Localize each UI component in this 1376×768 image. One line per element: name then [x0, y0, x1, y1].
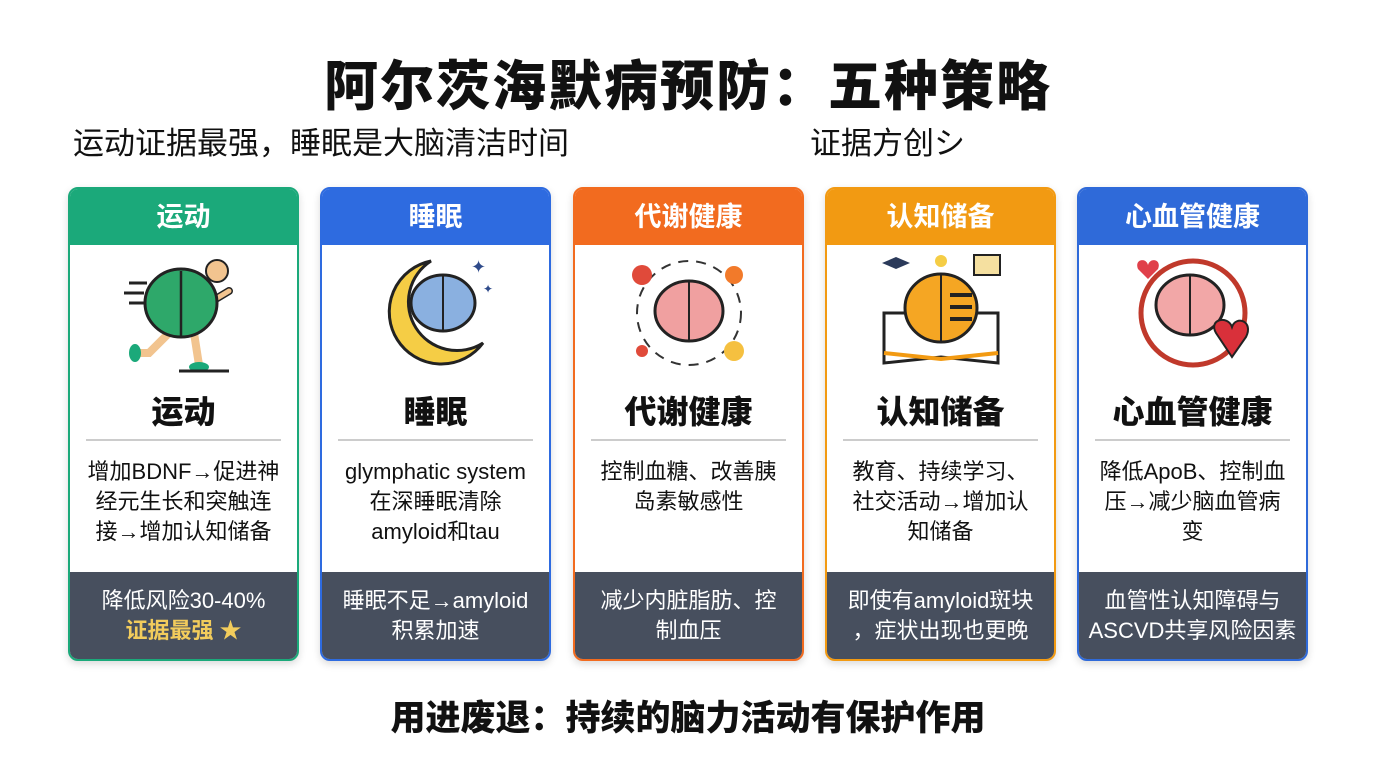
footer — [575, 572, 802, 659]
footer: 证据最强 ★ — [125, 618, 242, 643]
name: 认知储备 — [876, 394, 1004, 430]
description: 增加BDNF→促进神经元生长和突触连接→增加认知储备 — [88, 459, 279, 544]
description: glymphatic system — [345, 459, 526, 484]
panel: sleep — [320, 187, 551, 661]
header: 睡眠 — [408, 202, 462, 232]
name: 代谢健康 — [624, 394, 752, 430]
footer: ，症状出现也更晚 — [852, 618, 1028, 643]
subtitle left: 运动证据最强，睡眠是大脑清洁时间 — [73, 126, 569, 161]
panel: metabolic — [573, 187, 804, 661]
name: 运动 — [151, 394, 216, 430]
name: 睡眠 — [403, 394, 468, 430]
footer: 积累加速 — [391, 618, 480, 643]
icon: book brain — [882, 254, 1001, 365]
footer — [827, 572, 1054, 659]
header — [1079, 189, 1306, 245]
title: 阿尔茨海默病预防：五种策略 — [324, 57, 1052, 117]
panel: exercise — [68, 187, 299, 661]
header: 代谢健康 — [634, 202, 742, 232]
header — [322, 189, 549, 245]
description: 降低ApoB、控制血压→减少脑血管病变 — [1100, 459, 1285, 544]
footer — [70, 572, 297, 659]
icon: running brain — [124, 259, 233, 372]
panel: cardiovascular — [1077, 187, 1308, 661]
footer — [322, 572, 549, 659]
header: 认知储备 — [886, 202, 994, 232]
footer — [1079, 572, 1306, 659]
icon: moon brain: ✦ — [482, 282, 493, 296]
icon: moon brain: ✦ — [470, 257, 486, 277]
description — [345, 459, 526, 544]
footer: 制血压 — [655, 618, 722, 643]
header — [827, 189, 1054, 245]
header — [70, 189, 297, 245]
header: 心血管健康 — [1125, 202, 1260, 232]
subtitle right: 证据方创シ — [810, 126, 965, 161]
icon: heart brain — [1137, 258, 1249, 368]
header — [575, 189, 802, 245]
header: 运动 — [156, 202, 210, 232]
panel: cognitive reserve — [825, 187, 1056, 661]
description: 在深睡眠清除 — [369, 489, 502, 514]
name: 心血管健康 — [1112, 394, 1272, 430]
footer: 减少内脏脂肪、控 — [600, 588, 776, 613]
icon: moon brain — [388, 257, 493, 366]
icon: metabolic brain — [632, 260, 744, 366]
footer: 降低风险30-40% — [102, 588, 265, 613]
footer: 即使有amyloid斑块 — [848, 588, 1033, 613]
footer: ASCVD共享风险因素 — [1089, 618, 1296, 643]
description: amyloid和tau — [371, 519, 500, 544]
footer: 睡眠不足→amyloid — [343, 588, 528, 613]
description: 控制血糖、改善胰岛素敏感性 — [600, 459, 776, 514]
bottom caption: 用进废退：持续的脑力活动有保护作用 — [390, 699, 986, 738]
footer: 血管性认知障碍与 — [1104, 588, 1280, 613]
description: 教育、持续学习、社交活动→增加认知储备 — [852, 459, 1028, 544]
